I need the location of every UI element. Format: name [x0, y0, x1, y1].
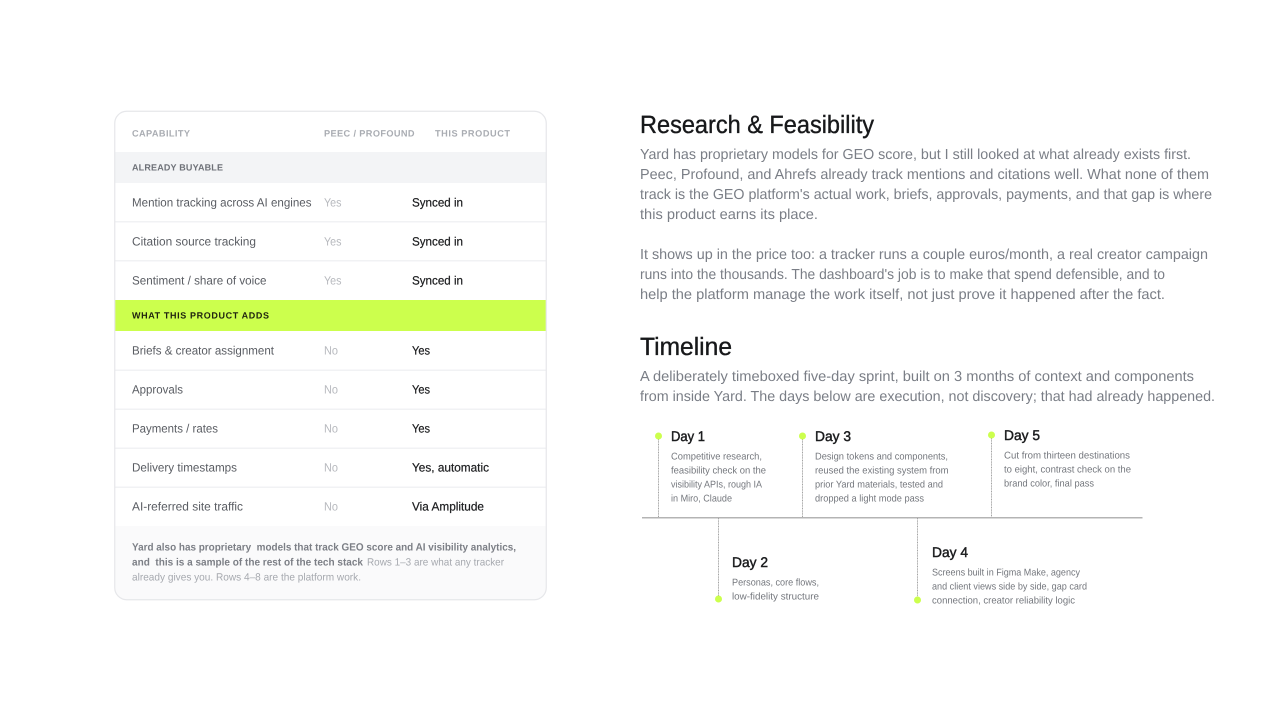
row: citation source tracking: Citation source tracking — [132, 234, 256, 248]
row: AI-referred traffic — [132, 499, 484, 513]
section band: what this product adds: WHAT THIS PRODUCT ADDS — [132, 310, 269, 320]
milestone: day 4: Screens built in Figma Make, agency — [932, 568, 1080, 578]
row: payments — [132, 421, 430, 435]
section band: what this product adds — [115, 300, 546, 331]
paragraph: timeline intro: A deliberately timeboxed five-day sprint, built on 3 months of context and components — [640, 369, 1194, 385]
paragraph: timeline intro — [640, 369, 1215, 405]
row: approvals: Approvals — [132, 382, 183, 396]
paragraph: price: help the platform manage the work itself, not just prove it happened after the fact. — [640, 287, 1165, 303]
row: payments: No — [324, 421, 338, 435]
heading: research and feasibility: Research & Feasibility — [640, 111, 874, 139]
row: mention tracking: Mention tracking across AI engines — [132, 195, 312, 209]
row: mention tracking: Yes — [324, 195, 342, 209]
table footnote: Yard also has proprietary models that track GEO score and AI visibility analytics, — [132, 542, 516, 554]
panel: capability comparison table — [114, 111, 546, 600]
milestone: day 1: visibility APIs, rough IA — [671, 480, 762, 490]
row: AI-referred traffic: AI-referred site traffic — [132, 499, 243, 513]
table footnote: already gives you. Rows 4–8 are the platform work. — [132, 572, 361, 584]
row: payments: Yes — [412, 421, 430, 435]
milestone: day 3: Design tokens and components, — [815, 452, 948, 462]
milestone: day 3: prior Yard materials, tested and — [815, 480, 943, 490]
row: citation source tracking: Synced in — [412, 234, 463, 248]
row: briefs: Briefs & creator assignment — [132, 343, 275, 357]
row: briefs — [132, 343, 430, 357]
row: sentiment: Sentiment / share of voice — [132, 273, 267, 287]
milestone: day 5: to eight, contrast check on the — [1004, 464, 1132, 476]
row: mention tracking — [132, 195, 463, 209]
row: citation source tracking: Yes — [324, 234, 342, 248]
section band: already buyable — [115, 152, 546, 183]
row: sentiment — [132, 273, 463, 287]
row: sentiment: Synced in — [412, 273, 463, 287]
timeline axis — [642, 517, 1142, 518]
row: approvals — [132, 382, 430, 396]
row: delivery timestamps — [132, 460, 489, 474]
row: briefs: No — [324, 343, 338, 357]
paragraph: price: runs into the thousands. The dashboard's job is to make that spend defensible, and to — [640, 267, 1165, 283]
milestone: day 3 — [799, 428, 948, 517]
table header row: THIS PRODUCT — [435, 128, 510, 138]
paragraph: price: It shows up in the price too: a tracker runs a couple euros/month, a real creator campaign — [640, 247, 1208, 263]
milestone: day 1: in Miro, Claude — [671, 494, 733, 504]
milestone: day 2: Day 2 — [732, 554, 768, 570]
milestone: day 3: dropped a light mode pass — [815, 494, 924, 504]
milestone: day 4: and client views side by side, gap card — [932, 582, 1087, 592]
milestone: day 1: Day 1 — [671, 428, 705, 444]
table footnote: and this is a sample of the rest of the tech stack — [132, 556, 363, 568]
table footnote — [115, 526, 546, 600]
table footnote: Rows 1–3 are what any tracker — [367, 556, 504, 568]
row: sentiment: Yes — [324, 273, 342, 287]
row: AI-referred traffic: Via Amplitude — [412, 499, 484, 513]
milestone: day 2: low-fidelity structure — [732, 592, 820, 602]
row: mention tracking: Synced in — [412, 195, 463, 209]
milestone: day 3: Day 3 — [815, 428, 851, 444]
table header row: CAPABILITY — [132, 128, 190, 138]
row: approvals: No — [324, 382, 338, 396]
milestone: day 5: Cut from thirteen destinations — [1004, 450, 1130, 462]
paragraph: existing tools: Yard has proprietary models for GEO score, but I still looked at what already exists first. — [640, 147, 1191, 163]
milestone: day 1: feasibility check on the — [671, 466, 767, 476]
milestone: day 2 — [715, 518, 820, 602]
row: delivery timestamps: Yes, automatic — [412, 460, 489, 474]
row: delivery timestamps: Delivery timestamps — [132, 460, 237, 474]
table header row: PEEC / PROFOUND — [324, 128, 415, 138]
row: briefs: Yes — [412, 343, 430, 357]
row: approvals: Yes — [412, 382, 430, 396]
milestone: day 4: connection, creator reliability logic — [932, 596, 1075, 606]
paragraph: timeline intro: from inside Yard. The days below are execution, not discovery; that had already happened. — [640, 389, 1215, 405]
milestone: day 4 — [914, 518, 1087, 606]
row: delivery timestamps: No — [324, 460, 338, 474]
paragraph: price — [640, 247, 1208, 303]
milestone: day 3: reused the existing system from — [815, 466, 948, 476]
milestone: day 1: Competitive research, — [671, 452, 762, 462]
paragraph: existing tools — [640, 147, 1212, 223]
milestone: day 5: brand color, final pass — [1004, 478, 1094, 490]
paragraph: existing tools: track is the GEO platform's actual work, briefs, approvals, payments, and that gap is where — [640, 187, 1212, 203]
heading: timeline: Timeline — [640, 333, 732, 361]
milestone: day 1 — [655, 428, 767, 517]
milestone: day 5 — [988, 427, 1132, 517]
paragraph: existing tools: Peec, Profound, and Ahrefs already track mentions and citations well. What none of them — [640, 167, 1209, 183]
milestone: day 4: Day 4 — [932, 544, 968, 560]
row: AI-referred traffic: No — [324, 499, 338, 513]
row: citation source tracking — [132, 234, 463, 248]
milestone: day 2: Personas, core flows, — [732, 578, 819, 588]
paragraph: existing tools: this product earns its place. — [640, 207, 818, 223]
chart: five-day timeline — [642, 427, 1142, 606]
row: payments: Payments / rates — [132, 421, 218, 435]
table header row — [132, 128, 510, 138]
section band: already buyable: ALREADY BUYABLE — [132, 162, 223, 172]
milestone: day 5: Day 5 — [1004, 427, 1040, 443]
